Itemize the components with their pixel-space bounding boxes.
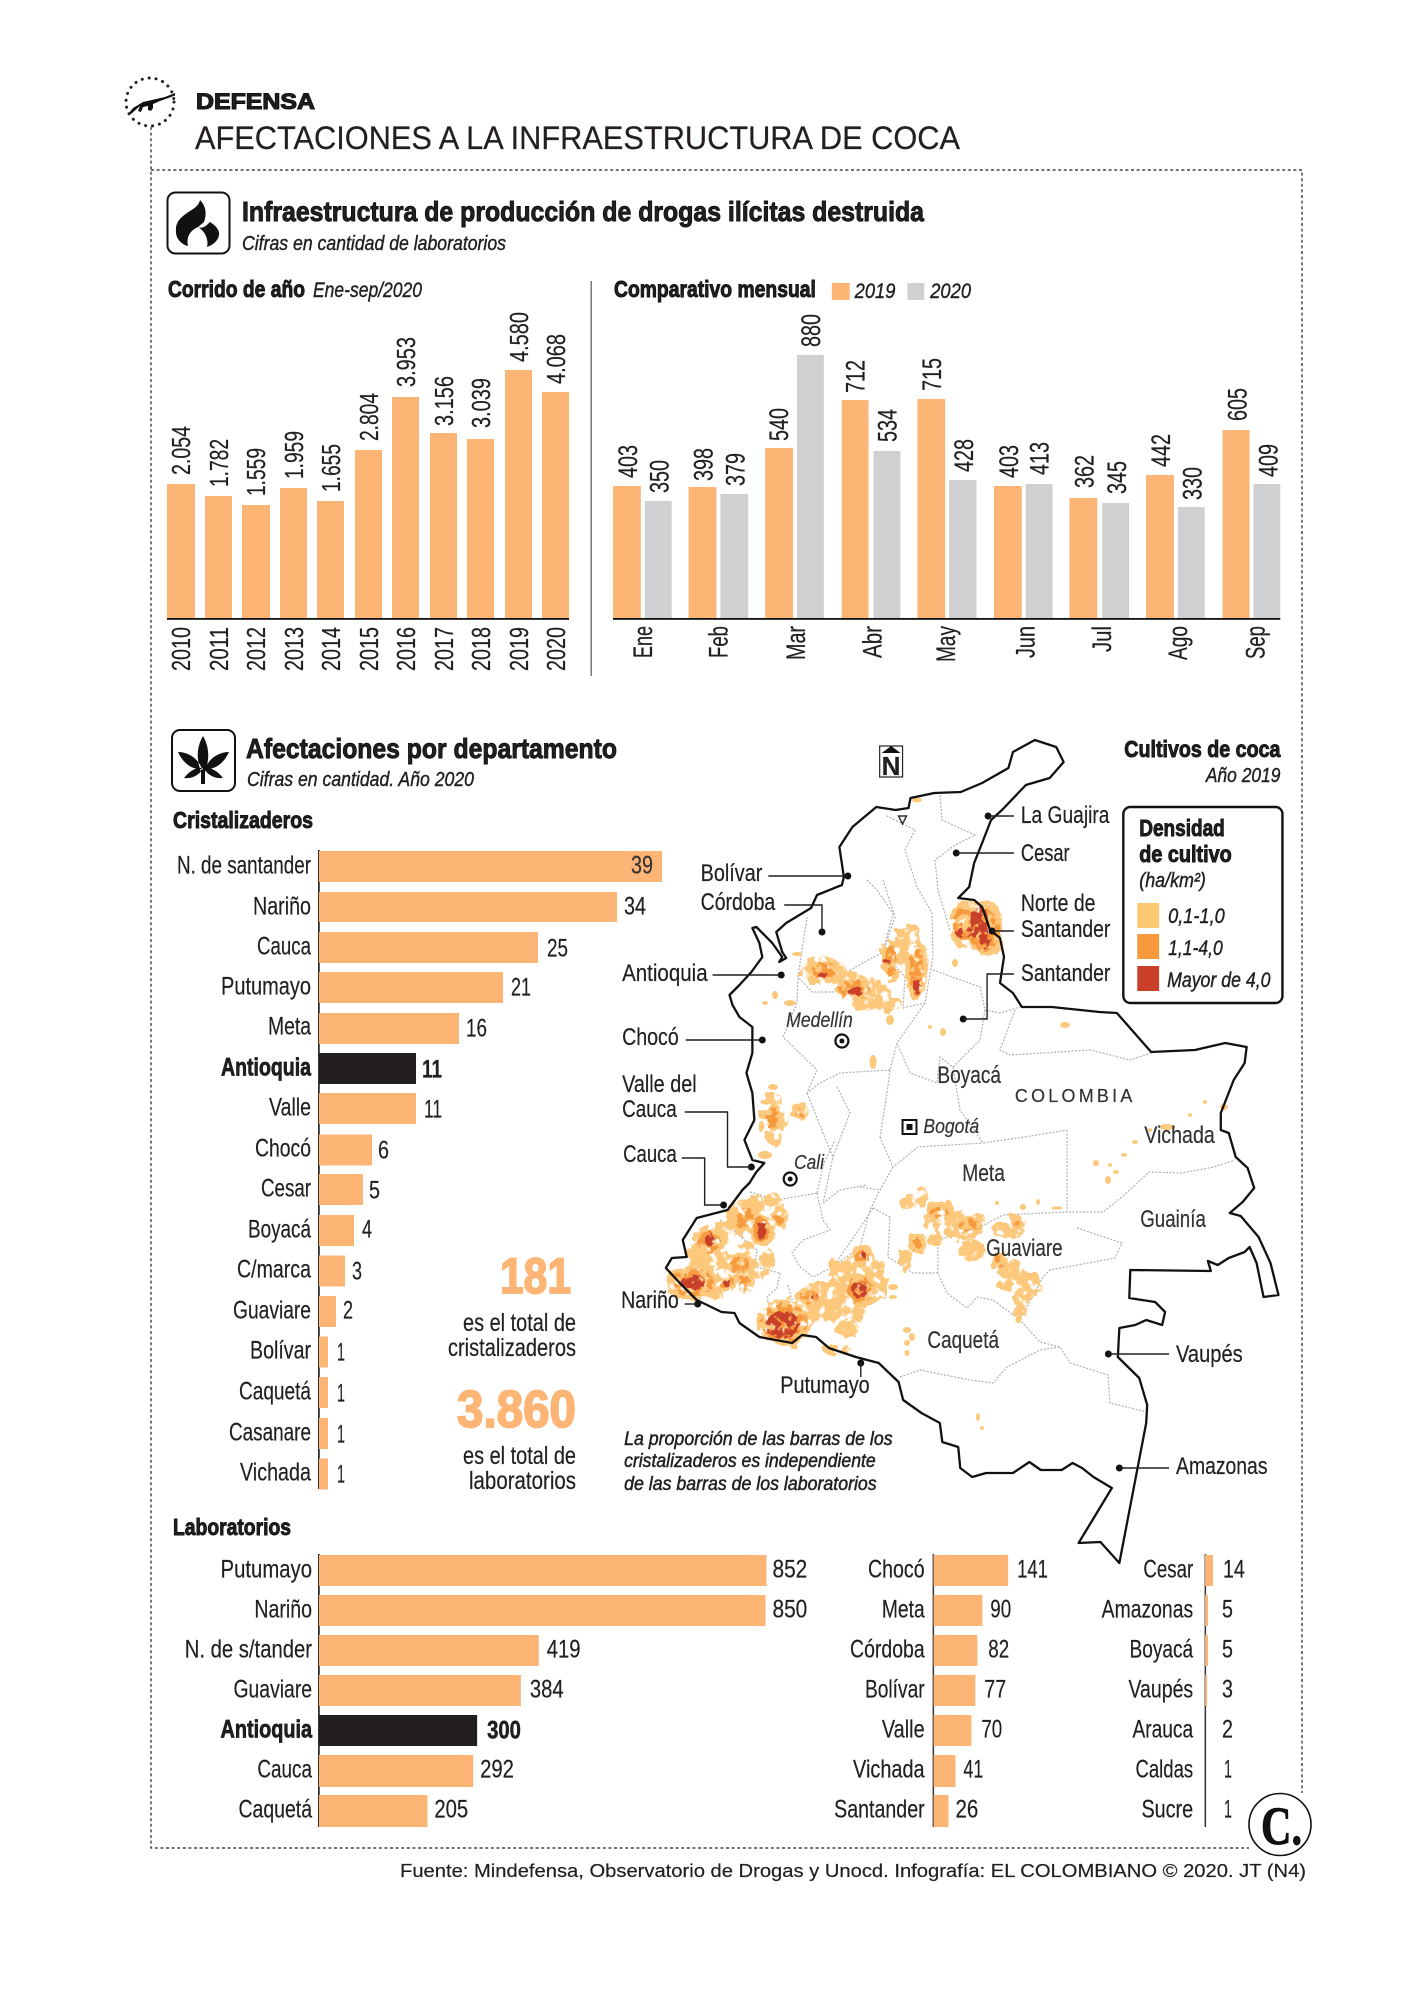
bar chart: corrido de año: 4.580 — [504, 312, 534, 362]
chart heading: corrido de año — [168, 276, 422, 302]
bar chart: laboratorios column 3: 5 — [1222, 1595, 1233, 1624]
bar chart: laboratorios column 2: Meta — [882, 1595, 925, 1624]
bar chart: corrido de año: 2014 — [316, 627, 346, 671]
bar chart: laboratorios column 2: 26 — [955, 1795, 978, 1824]
bar chart: corrido de año: 2016 — [391, 627, 421, 671]
panel: infraestructura destruida — [166, 192, 1283, 676]
subheading: cifras año 2020: Cifras en cantidad. Año 2020 — [247, 769, 474, 791]
bar chart: corrido de año: 3.156 — [429, 376, 459, 426]
legend: densidad de cultivo: 1,1-4,0 — [1168, 937, 1223, 960]
bar chart: comparativo mensual: May — [931, 626, 961, 662]
bar chart: laboratorios column 3: Vaupés — [1129, 1675, 1193, 1704]
map overlay: outline, legend and labels — [621, 736, 1282, 1563]
bar chart: comparativo mensual: Ene — [628, 626, 658, 658]
bar chart: comparativo mensual: 534 — [872, 409, 902, 442]
bar chart: laboratorios column 1: 419 — [547, 1635, 581, 1664]
bar chart: comparativo mensual: 540 — [764, 408, 794, 441]
bar chart: laboratorios column 1: 852 — [772, 1555, 807, 1584]
bar chart: comparativo mensual: 398 — [689, 448, 718, 481]
heading: laboratorios: Laboratorios — [173, 1514, 291, 1540]
legend: densidad de cultivo: de cultivo — [1139, 841, 1232, 867]
bar chart: corrido de año: 1.655 — [316, 444, 346, 492]
bar chart: cristalizaderos: Cesar — [261, 1174, 311, 1202]
bar chart: comparativo mensual: 880 — [796, 314, 826, 347]
map inner place names: Vichada — [1144, 1122, 1215, 1149]
bar chart: cristalizaderos: Antioquia — [221, 1054, 312, 1082]
bar chart: comparativo mensual: Ago — [1163, 626, 1193, 660]
coca density medium — [673, 910, 1020, 1341]
map inner place names: Guainía — [1140, 1206, 1206, 1233]
bar chart: laboratorios column 2: Santander — [834, 1795, 925, 1824]
bar chart: comparativo mensual: 379 — [720, 453, 750, 486]
map inner place names: Medellín — [786, 1009, 853, 1032]
map callout labels: Santander — [1021, 916, 1110, 943]
bar chart: corrido de año: 2011 — [204, 627, 234, 671]
bar chart: corrido de año: 4.068 — [541, 334, 571, 384]
icon: rifle in dashed circle — [126, 78, 175, 126]
bar chart: cristalizaderos: Guaviare — [233, 1296, 311, 1324]
bar chart: corrido de año: 2.054 — [166, 426, 196, 475]
bar chart: laboratorios column 3: Sucre — [1141, 1795, 1193, 1824]
bar chart: laboratorios column 3: Arauca — [1132, 1715, 1193, 1744]
bar chart: comparativo mensual: 409 — [1253, 444, 1283, 477]
bar chart: comparativo mensual: Jul — [1087, 626, 1117, 652]
bar chart: cristalizaderos: 1 — [337, 1460, 345, 1488]
bar chart: cristalizaderos: 16 — [466, 1014, 487, 1042]
section label: Defensa: DEFENSA — [196, 89, 315, 114]
bar chart: laboratorios column 3: 14 — [1223, 1555, 1245, 1584]
map inner place names — [784, 1009, 1215, 1354]
bar chart: cristalizaderos: Casanare — [229, 1418, 311, 1446]
bar chart: laboratorios column 1: 384 — [530, 1675, 564, 1704]
bar chart: cristalizaderos: Chocó — [255, 1134, 311, 1162]
stat: 3.860 laboratorios: laboratorios — [469, 1467, 576, 1495]
map callout labels: Santander — [1021, 960, 1110, 987]
icon: coca leaf — [172, 730, 235, 791]
map note: proporción de las barras — [624, 1429, 893, 1495]
bar chart: comparativo mensual: 330 — [1178, 467, 1208, 500]
bar chart: laboratorios column 1: Nariño — [254, 1595, 312, 1624]
coca density high — [682, 907, 990, 1338]
map inner place names: Guaviare — [986, 1235, 1063, 1262]
bar chart: comparativo mensual: Mar — [781, 626, 811, 660]
bar chart: laboratorios column 3: Amazonas — [1102, 1595, 1193, 1624]
bar chart: laboratorios column 1: Cauca — [257, 1755, 312, 1784]
bar chart: laboratorios column 3: 1 — [1224, 1795, 1232, 1824]
map callout labels: Cauca — [622, 1096, 677, 1123]
bar chart: corrido de año: 2020 — [541, 627, 571, 671]
bar chart: corrido de año: 2017 — [429, 627, 459, 671]
map inner place names: COLOMBIA — [1015, 1086, 1132, 1106]
bar chart: corrido de año: 2013 — [279, 627, 309, 671]
bar chart: comparativo mensual: 403 — [613, 445, 643, 478]
map callout labels: Chocó — [622, 1024, 679, 1051]
bar chart: cristalizaderos: 1 — [337, 1380, 345, 1408]
bar chart: comparativo mensual: Feb — [703, 626, 733, 658]
bar chart: laboratorios column 1 — [185, 1554, 807, 1827]
map callout labels: Cauca — [623, 1141, 677, 1168]
bar chart: cristalizaderos: N. de santander — [177, 852, 311, 880]
bar chart: cristalizaderos: Vichada — [240, 1458, 311, 1486]
bar chart: laboratorios column 2: Vichada — [853, 1755, 925, 1784]
map note: proporción de las barras: de las barras de los laboratorios — [624, 1474, 877, 1495]
bar chart: laboratorios column 3: 3 — [1222, 1675, 1233, 1704]
bar chart: comparativo mensual: 428 — [949, 439, 979, 472]
icon: north arrow — [880, 746, 903, 781]
bar chart: cristalizaderos: Valle — [269, 1094, 311, 1122]
icon: north arrow: N — [882, 753, 901, 781]
bar chart: laboratorios column 2: Córdoba — [850, 1635, 925, 1664]
main title: AFECTACIONES A LA INFRAESTRUCTURA DE COCA — [195, 120, 961, 156]
heading: infraestructura: Infraestructura de producción de drogas ilícitas destruida — [242, 196, 924, 227]
chart heading: corrido de año: Ene-sep/2020 — [313, 279, 422, 302]
bar chart: laboratorios column 1: 292 — [480, 1755, 514, 1784]
coca density low — [669, 903, 1039, 1352]
bar chart: cristalizaderos: 34 — [624, 892, 646, 920]
legend: densidad de cultivo: Densidad — [1139, 815, 1225, 841]
map callout labels — [621, 802, 1268, 1480]
bar chart: laboratorios column 1: Putumayo — [221, 1555, 312, 1584]
bar chart: laboratorios column 1: Caquetá — [238, 1795, 312, 1824]
bar chart: cristalizaderos: 11 — [422, 1056, 442, 1084]
map inner place names: Bogotá — [923, 1116, 979, 1138]
bar chart: laboratorios column 1: 300 — [487, 1716, 521, 1745]
bar chart: corrido de año: 1.959 — [279, 431, 309, 479]
stat: 181 cristalizaderos: 181 — [500, 1248, 571, 1304]
bar chart: comparativo mensual: 605 — [1223, 388, 1252, 421]
bar chart: cristalizaderos: 4 — [362, 1216, 372, 1244]
bar chart: corrido de año: 2012 — [241, 627, 271, 671]
chart heading and legend: comparativo mensual: Comparativo mensual — [614, 276, 816, 302]
bar chart: corrido de año: 2015 — [354, 627, 384, 671]
bar chart: cristalizaderos: 2 — [343, 1296, 353, 1324]
bar chart: corrido de año: 3.039 — [466, 378, 496, 428]
bar chart: corrido de año: 2019 — [504, 627, 534, 671]
map callout labels: Putumayo — [780, 1372, 870, 1399]
bar chart: laboratorios column 2: 77 — [984, 1675, 1006, 1704]
bar chart: comparativo mensual: 403 — [994, 445, 1024, 478]
bar chart: laboratorios column 1: 205 — [434, 1795, 468, 1824]
bar chart: cristalizaderos: Boyacá — [248, 1216, 311, 1244]
logo: El Colombiano C: C. — [1261, 1796, 1302, 1856]
bar chart: comparativo mensual: 345 — [1102, 461, 1132, 494]
bar chart: laboratorios column 2 — [834, 1554, 1048, 1827]
bar chart: laboratorios column 1: Antioquia — [221, 1715, 313, 1744]
map callout labels: La Guajira — [1021, 802, 1110, 829]
heading: cristalizaderos: Cristalizaderos — [173, 807, 313, 833]
legend: densidad de cultivo: 0,1-1,0 — [1168, 905, 1225, 928]
map callout labels: Vaupés — [1176, 1341, 1243, 1368]
bar chart: cristalizaderos — [177, 850, 662, 1490]
bar chart: cristalizaderos: 39 — [631, 852, 653, 880]
legend: densidad de cultivo: (ha/km²) — [1139, 870, 1206, 892]
map department borders — [720, 795, 1235, 1412]
map title: cultivos de coca: Año 2019 — [1205, 765, 1280, 787]
bar chart: laboratorios column 2: 70 — [981, 1715, 1002, 1744]
bar chart: cristalizaderos: Bolívar — [250, 1336, 311, 1364]
chart heading and legend: comparativo mensual: 2020 — [929, 280, 971, 303]
panel: afectaciones por departamento — [172, 730, 1245, 1827]
coca density small patches — [758, 798, 1228, 1430]
bar chart: corrido de año: 3.953 — [391, 337, 421, 387]
legend: densidad de cultivo: Mayor de 4,0 — [1167, 969, 1271, 992]
map country outline — [666, 740, 1278, 1563]
icon: flame — [168, 192, 230, 254]
bar chart: laboratorios column 2: 141 — [1017, 1555, 1048, 1584]
bar chart: cristalizaderos: 1 — [337, 1338, 345, 1366]
map callout labels: Nariño — [621, 1287, 679, 1314]
map note: proporción de las barras: La proporción de las barras de los — [624, 1429, 893, 1450]
source footer: Fuente: Mindefensa, Observatorio de Drogas y Unocd. Infografía: EL COLOMBIANO © 2020. JT (N4) — [400, 1860, 1306, 1881]
bar chart: laboratorios column 1: Guaviare — [233, 1675, 312, 1704]
bar chart: cristalizaderos: 3 — [352, 1258, 362, 1286]
bar chart: corrido de año: 2018 — [466, 627, 496, 671]
map title: cultivos de coca — [1124, 736, 1281, 787]
stat: 3.860 laboratorios: 3.860 — [457, 1381, 576, 1439]
bar chart: laboratorios column 1: N. de s/tander — [185, 1635, 312, 1664]
map inner place names: Meta — [962, 1160, 1006, 1187]
map callout labels: Bolívar — [701, 860, 762, 887]
bar chart: comparativo mensual: Abr — [858, 626, 887, 658]
chart heading: corrido de año: Corrido de año — [168, 276, 305, 302]
bar chart: laboratorios column 3 — [1102, 1554, 1245, 1827]
bar chart: cristalizaderos: C/marca — [237, 1256, 311, 1284]
map callout labels: Norte de — [1021, 890, 1095, 917]
bar chart: cristalizaderos: Nariño — [253, 892, 311, 920]
stat: 181 cristalizaderos: es el total de — [463, 1309, 576, 1337]
map note: proporción de las barras: cristalizaderos es independiente — [624, 1451, 876, 1472]
bar chart: corrido de año: 1.559 — [241, 448, 271, 496]
bar chart: cristalizaderos: Caquetá — [239, 1378, 311, 1406]
bar chart: comparativo mensual: 413 — [1025, 442, 1055, 475]
bar chart: cristalizaderos: Cauca — [257, 932, 311, 960]
chart heading and legend: comparativo mensual: 2019 — [854, 280, 896, 303]
stat: 3.860 laboratorios: es el total de — [463, 1442, 576, 1470]
legend: densidad de cultivo — [1123, 807, 1282, 1003]
bar chart: cristalizaderos: 5 — [369, 1176, 380, 1204]
map inner place names: Boyacá — [937, 1062, 1002, 1089]
stat: 3.860 laboratorios — [457, 1381, 576, 1495]
bar chart: corrido de año — [166, 312, 571, 671]
bar chart: comparativo mensual: 715 — [917, 358, 947, 391]
bar chart: laboratorios column 2: 41 — [963, 1755, 983, 1784]
bar chart: laboratorios column 2: 90 — [990, 1595, 1011, 1624]
map inner place names: Caquetá — [927, 1327, 1000, 1354]
map callout labels: Córdoba — [701, 889, 776, 916]
bar chart: cristalizaderos: 1 — [337, 1420, 345, 1448]
bar chart: laboratorios column 3: Caldas — [1135, 1755, 1193, 1784]
heading: afectaciones: Afectaciones por departamento — [246, 733, 617, 764]
subheading: cifras laboratorios: Cifras en cantidad de laboratorios — [242, 233, 506, 255]
bar chart: laboratorios column 3: Boyacá — [1130, 1635, 1193, 1664]
bar chart: corrido de año: 2.804 — [354, 393, 384, 441]
bar chart: corrido de año: 2010 — [166, 627, 196, 671]
bar chart: laboratorios column 1: 850 — [772, 1595, 807, 1624]
bar chart: laboratorios column 2: 82 — [988, 1635, 1009, 1664]
stat: 181 cristalizaderos: cristalizaderos — [448, 1334, 576, 1362]
bar chart: comparativo mensual: Sep — [1240, 626, 1270, 659]
bar chart: comparativo mensual: Jun — [1011, 626, 1041, 658]
map callout labels: Valle del — [622, 1071, 697, 1098]
map callout labels: Antioquia — [622, 960, 708, 987]
bar chart: laboratorios column 2: Chocó — [868, 1555, 925, 1584]
bar chart: comparativo mensual: 442 — [1146, 434, 1176, 467]
bar chart: cristalizaderos: 11 — [424, 1096, 442, 1124]
bar chart: comparativo mensual: 350 — [645, 460, 675, 493]
bar chart: comparativo mensual: 712 — [841, 360, 871, 393]
map callout labels: Cesar — [1021, 840, 1070, 867]
map: cultivos de coca en Colombia — [621, 736, 1282, 1563]
bar chart: corrido de año: 1.782 — [204, 439, 234, 487]
bar chart: cristalizaderos: 21 — [511, 974, 531, 1002]
chart heading and legend: comparativo mensual — [614, 276, 971, 303]
bar chart: laboratorios column 3: 2 — [1222, 1715, 1233, 1744]
map title: cultivos de coca: Cultivos de coca — [1124, 736, 1281, 762]
bar chart: laboratorios column 3: 1 — [1224, 1755, 1232, 1784]
bar chart: laboratorios column 3: 5 — [1222, 1635, 1233, 1664]
bar chart: laboratorios column 2: Valle — [882, 1715, 925, 1744]
bar chart: laboratorios column 3: Cesar — [1143, 1555, 1193, 1584]
stat: 181 cristalizaderos — [448, 1248, 576, 1362]
bar chart: comparativo mensual — [613, 314, 1283, 662]
map callout labels: Amazonas — [1176, 1453, 1268, 1480]
bar chart: cristalizaderos: 6 — [378, 1136, 389, 1164]
bar chart: cristalizaderos: Meta — [268, 1012, 311, 1040]
bar chart: comparativo mensual: 362 — [1069, 455, 1099, 488]
map inner place names: Cali — [794, 1152, 824, 1174]
bar chart: cristalizaderos: 25 — [547, 934, 568, 962]
bar chart: cristalizaderos: Putumayo — [221, 972, 311, 1000]
bar chart: laboratorios column 2: Bolívar — [865, 1675, 925, 1704]
